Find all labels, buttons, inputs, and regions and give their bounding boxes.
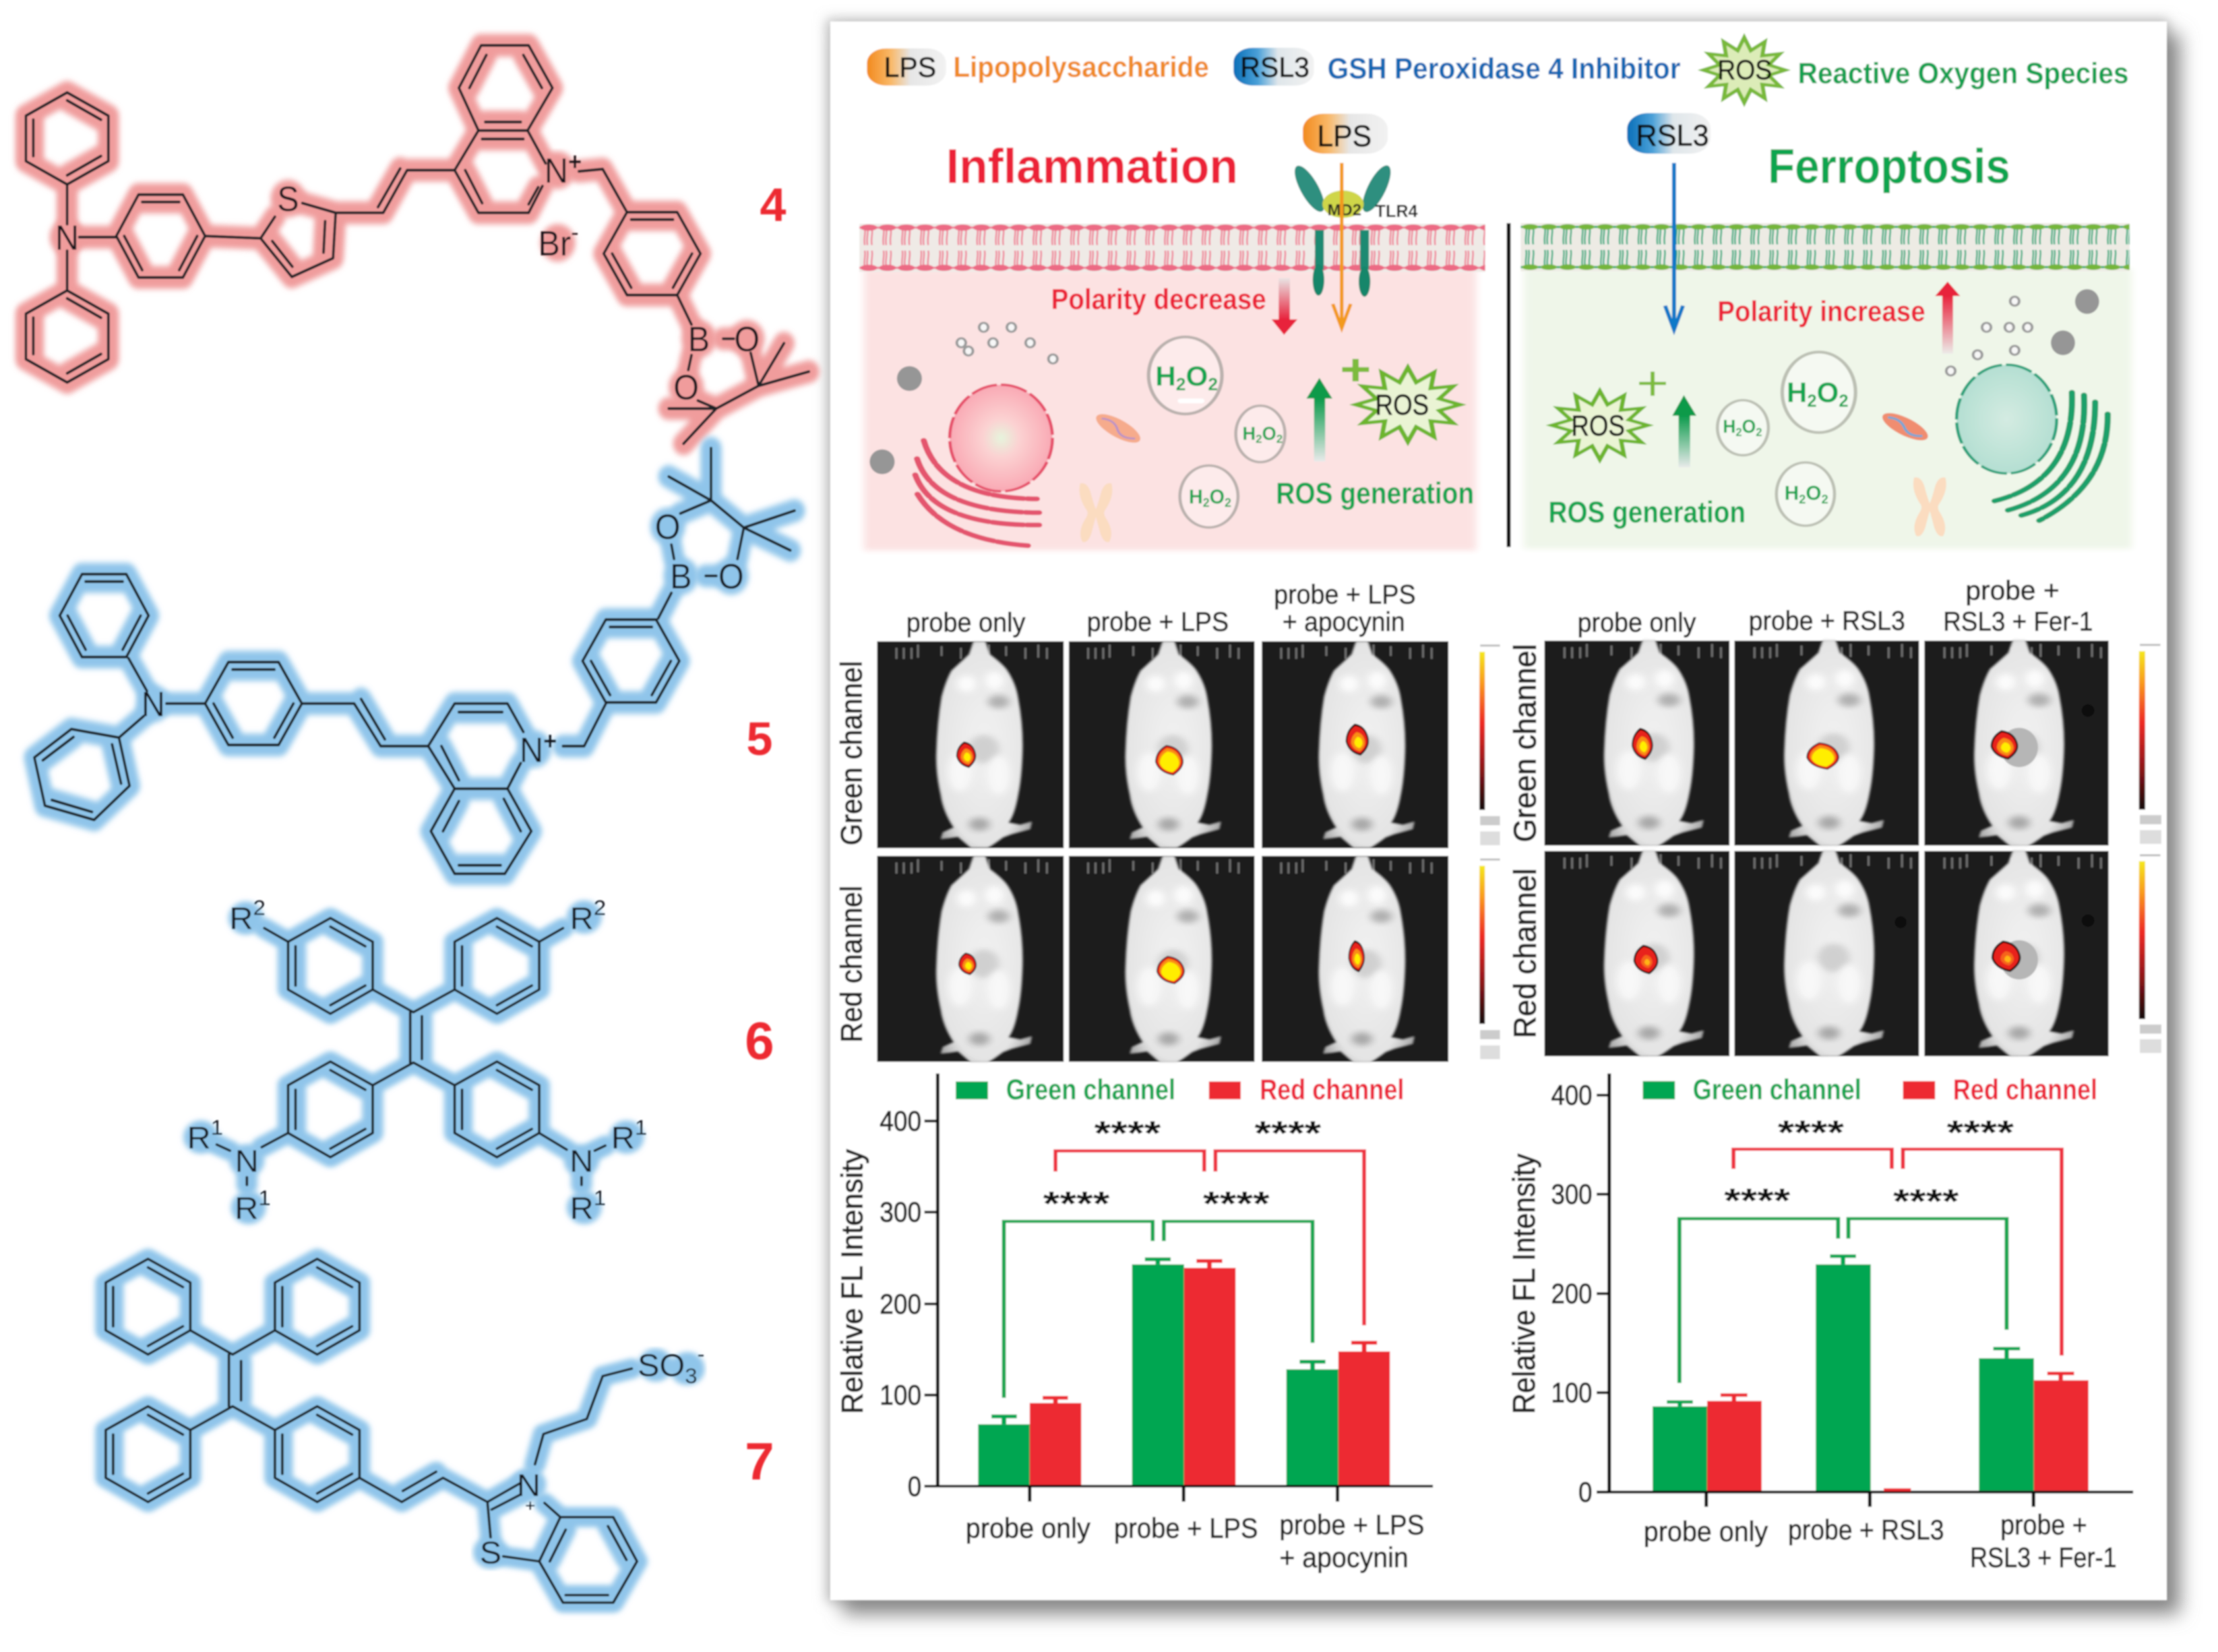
bubble: H2O2 large <box>1148 337 1222 414</box>
panel: inflammation schematic <box>859 114 1511 551</box>
x axis labels: + apocynin <box>1279 1542 1409 1574</box>
label: polarity decrease: Polarity decrease <box>1051 283 1266 315</box>
x axis labels: probe only <box>1644 1517 1768 1548</box>
column labels: probe + <box>1965 576 2060 606</box>
chemical structure: probe 7 with blue halo: 3 <box>685 1364 698 1388</box>
x axis labels <box>1644 1509 2117 1573</box>
chemical structure: probe 6 with blue halo: R <box>229 902 253 936</box>
bubble: H2O2 small: O <box>1262 423 1276 443</box>
bubble: H2O2 medium: 2 <box>1225 496 1231 510</box>
bars: probe only <box>978 1398 1081 1486</box>
heading: Ferroptosis: Ferroptosis <box>1768 139 2010 193</box>
bubble: H2O2 small: 2 <box>1276 433 1283 446</box>
chemical structure: probe 4 with red halo: + <box>568 148 582 176</box>
chemical structure: probe 6 with blue halo <box>187 896 647 1226</box>
organelle: endoplasmic reticulum <box>915 440 1039 546</box>
label: ROS generation: ROS generation <box>1276 477 1474 510</box>
significance brackets: green channel <box>1680 1181 2006 1383</box>
organelles: debris and vesicles <box>1946 289 2099 375</box>
chemical structure: probe 4 with red halo: N <box>545 150 568 190</box>
row label: red channel: Red channel <box>835 886 869 1043</box>
pill: LPS stimulus: LPS <box>1317 120 1372 154</box>
arrow: RSL3 entering the cell <box>1665 163 1683 330</box>
x axis labels <box>966 1509 1424 1574</box>
chemical structure: probe 4 with red halo: O <box>673 367 699 407</box>
colour scale: green channel <box>2139 644 2161 844</box>
bar chart: RSL3 model <box>1506 1073 2133 1573</box>
chemical structure: probe 6 with blue halo: R <box>235 1192 258 1226</box>
significance brackets: green channel: **** <box>1893 1182 1959 1221</box>
arrow: ROS increase <box>1306 378 1332 462</box>
chemical structure: probe 5 with blue halo: B <box>670 556 692 596</box>
row label: green channel: Green channel <box>1507 644 1543 843</box>
column labels: probe + RSL3 <box>1749 606 1905 636</box>
image: probe + LPS + apocynin, green channel <box>1262 641 1448 848</box>
bubble: H2O2 large: 2 <box>1839 392 1849 411</box>
y axis ticks and labels: 100 <box>1551 1377 1593 1409</box>
bars: probe + RSL3 <box>1816 1256 1871 1492</box>
chemical structure: probe 7 with blue halo: - <box>698 1342 705 1366</box>
pill: RSL3 stimulus <box>1627 113 1711 154</box>
x axis labels: probe + LPS <box>1279 1509 1424 1541</box>
significance brackets: red channel <box>1733 1113 2062 1355</box>
y axis ticks and labels: 400 <box>1551 1080 1593 1111</box>
bars: probe + LPS <box>1132 1259 1235 1486</box>
chemical structure: probe 6 with blue halo: N <box>235 1144 259 1179</box>
icon: chromosome <box>1080 483 1112 542</box>
pill: LPS stimulus <box>1303 114 1388 154</box>
chemical structure: probe 4 with red halo: Br <box>538 223 571 263</box>
chemical structure: probe 6 with blue halo: N <box>569 1144 593 1179</box>
significance brackets: green channel: **** <box>1043 1185 1110 1223</box>
cell interior: inflammation <box>864 268 1476 551</box>
column labels: probe + LPS <box>1274 580 1416 609</box>
organelle: endoplasmic reticulum <box>1994 392 2107 520</box>
bubble: H2O2 large: H <box>1787 377 1813 408</box>
image: probe + RSL3 + Fer-1, green channel <box>1924 640 2109 846</box>
bubble: H2O2 medium: 2 <box>1821 492 1828 506</box>
bubble: H2O2 medium: O <box>1806 483 1821 505</box>
bubble: H2O2 medium <box>1777 462 1835 526</box>
y axis ticks and labels: 100 <box>880 1380 921 1411</box>
chemical structure: probe 4 with red halo: - <box>571 218 579 246</box>
cell interior: ferroptosis <box>1524 268 2132 549</box>
chemical structure: probe 5 with blue halo: N <box>142 684 165 724</box>
icon: ROS burst <box>1355 367 1460 442</box>
organelle: nucleus <box>1957 365 2057 473</box>
bubble: H2O2 medium: 2 <box>1799 492 1806 506</box>
y axis ticks and labels: 400 <box>880 1105 921 1137</box>
chemical structure: probe 6 with blue halo: R <box>570 1192 594 1226</box>
column labels <box>1578 576 2093 638</box>
significance brackets: green channel <box>1004 1185 1313 1398</box>
column labels: probe + LPS <box>1087 607 1229 637</box>
bubble: H2O2 large: 2 <box>1208 375 1218 394</box>
x axis labels: probe only <box>966 1512 1090 1544</box>
bubble: H2O2 large: 2 <box>1807 392 1817 411</box>
image: probe + LPS + apocynin, red channel <box>1262 856 1448 1062</box>
bubble: H2O2 medium: H <box>1785 483 1804 505</box>
pill: RSL3 stimulus: RSL3 <box>1636 119 1709 153</box>
bars: probe + RSL3 + Fer-1 <box>1979 1349 2089 1491</box>
legend item: LPS: Lipopolysaccharide <box>953 51 1209 84</box>
chemical structure: probe 4 with red halo: B <box>688 319 710 359</box>
bubble: H2O2 small: 2 <box>1756 426 1762 439</box>
image: probe only, red channel <box>877 856 1064 1062</box>
image: probe only, green channel <box>877 641 1064 848</box>
bars: probe + LPS + apocynin <box>1287 1343 1390 1486</box>
chemical structure: probe 5 with blue halo: O <box>655 507 681 547</box>
compound number 5: 5 <box>747 712 772 765</box>
bubble: H2O2 small: 2 <box>1735 426 1742 439</box>
chemical structure: probe 6 with blue halo: R <box>570 902 594 936</box>
chemical structure: probe 6 with blue halo: 2 <box>594 896 606 919</box>
x axis labels: probe + <box>2000 1509 2087 1541</box>
bubble: H2O2 large: O <box>1817 377 1839 408</box>
x axis labels: probe + RSL3 <box>1788 1515 1944 1546</box>
legend item: RSL3: GSH Peroxidase 4 Inhibitor <box>1328 52 1681 85</box>
chemical structure: probe 4 with red halo: S <box>277 179 299 219</box>
icon: ROS burst: ROS <box>1376 388 1429 421</box>
chart legend <box>956 1074 1404 1106</box>
organelle: mitochondrion <box>1090 409 1146 448</box>
icon: ROS burst <box>1551 391 1648 460</box>
column labels: RSL3 + Fer-1 <box>1943 607 2093 637</box>
image: probe + LPS, green channel <box>1069 641 1254 848</box>
bubble: H2O2 medium: O <box>1210 486 1225 508</box>
significance brackets: red channel: **** <box>1095 1114 1161 1153</box>
y axis ticks and labels: 200 <box>880 1289 921 1320</box>
image: probe + RSL3, green channel <box>1734 640 1919 846</box>
column labels: probe only <box>1578 608 1696 638</box>
label: polarity increase: Polarity increase <box>1717 295 1926 328</box>
legend: abbreviations <box>867 38 2128 102</box>
panel: mouse imaging, LPS model <box>835 580 1500 1062</box>
organelle: mitochondrion <box>1877 408 1934 446</box>
legend item: RSL3: RSL3 <box>1240 52 1310 84</box>
icon: TLR4 MD2 receptor: TLR4 <box>1376 202 1418 221</box>
image: probe only, red channel <box>1545 850 1729 1057</box>
bar: red channel near zero <box>1884 1488 1911 1492</box>
icon: TLR4 MD2 receptor <box>1289 163 1418 297</box>
bubble: H2O2 large: O <box>1185 361 1208 392</box>
arrow: polarity increase <box>1935 282 1960 354</box>
bubble: H2O2 medium: 2 <box>1203 496 1210 510</box>
label: ROS generation: ROS generation <box>1549 495 1746 529</box>
bubble: H2O2 medium: H <box>1189 486 1208 508</box>
legend item: ROS: ROS <box>1717 55 1772 86</box>
axes <box>1597 1074 2133 1507</box>
y axis ticks and labels: 200 <box>1551 1278 1593 1310</box>
compound number 7: 7 <box>745 1432 774 1491</box>
column labels <box>906 580 1416 637</box>
chart legend: Red channel <box>1953 1073 2097 1106</box>
compound number 6: 6 <box>745 1011 774 1070</box>
chemical structure: probe 6 with blue halo: R <box>187 1121 211 1156</box>
x axis labels: probe + LPS <box>1114 1512 1258 1544</box>
bar chart: LPS model <box>835 1074 1433 1574</box>
chemical structure: probe 5 with blue halo: O <box>718 556 744 596</box>
y axis title: Relative FL Intensity <box>835 1149 869 1414</box>
chemical structure: probe 7 with blue halo: + <box>525 1495 536 1515</box>
image: probe only, green channel <box>1545 640 1729 846</box>
chemical structure: probe 5 with blue halo: + <box>543 727 557 755</box>
image: probe + LPS, red channel <box>1069 856 1254 1062</box>
chemical structure: probe 4 with red halo <box>26 45 809 443</box>
panel: mouse imaging, RSL3 model <box>1507 576 2161 1057</box>
legend item: LPS: LPS <box>884 52 936 84</box>
column labels: probe only <box>906 607 1026 637</box>
y axis ticks and labels: 0 <box>1578 1477 1593 1508</box>
panel: ferroptosis schematic <box>1520 113 2132 549</box>
y axis title: Relative FL Intensity <box>1506 1153 1541 1414</box>
y axis ticks and labels <box>1551 1080 1609 1508</box>
arrow: LPS entering the cell <box>1333 163 1351 328</box>
y axis ticks and labels: 0 <box>908 1471 921 1502</box>
chemical structure: probe 5 with blue halo <box>34 448 795 874</box>
legend item: ROS <box>1703 38 2128 102</box>
bubble: H2O2 small <box>1717 400 1768 455</box>
chemical structure: probe 7 with blue halo: N <box>517 1469 541 1503</box>
chart legend: Green channel <box>1006 1074 1175 1106</box>
bubble: H2O2 large: 2 <box>1176 375 1185 394</box>
image: probe + RSL3, red channel <box>1734 850 1919 1057</box>
x axis labels: RSL3 + Fer-1 <box>1970 1542 2117 1573</box>
icon: chromosome <box>1913 477 1946 537</box>
y axis ticks and labels: 300 <box>1551 1179 1593 1211</box>
arrow: ROS increase <box>1672 395 1696 467</box>
organelles: debris and vesicles <box>869 323 1057 474</box>
chemical structure: probe 6 with blue halo: 1 <box>635 1115 647 1139</box>
panel: background card with shadow <box>826 19 2180 1614</box>
arrow: polarity decrease <box>1272 278 1297 335</box>
image: probe + RSL3 + Fer-1, red channel <box>1924 850 2109 1057</box>
chemical structure: probe 6 with blue halo: R <box>611 1121 635 1156</box>
y axis ticks and labels: 300 <box>880 1197 921 1228</box>
bubble: H2O2 small <box>1236 406 1285 462</box>
chemical structure: probe 4 with red halo: O <box>734 319 760 359</box>
y axis ticks and labels <box>880 1105 937 1502</box>
bubble: H2O2 large: H <box>1155 361 1181 392</box>
significance brackets: red channel: **** <box>1778 1113 1844 1152</box>
row label: red channel: Red channel <box>1507 868 1543 1038</box>
chemical structure: probe 6 with blue halo: 1 <box>211 1115 223 1139</box>
colour scale: red channel <box>2139 855 2161 1053</box>
chart legend: Green channel <box>1693 1073 1861 1106</box>
colour scale: green channel <box>1479 644 1500 845</box>
divider <box>1507 223 1511 547</box>
heading: Inflammation: Inflammation <box>946 139 1238 193</box>
icon: plus <box>1639 371 1666 396</box>
chemical structure: probe 6 with blue halo: 2 <box>253 896 266 919</box>
chemical structure: probe 4 with red halo: N <box>55 218 79 257</box>
row label: green channel: Green channel <box>835 661 869 845</box>
bubble: H2O2 medium <box>1180 466 1238 528</box>
icon: ROS burst: ROS <box>1571 409 1625 441</box>
bubble: H2O2 small: 2 <box>1256 433 1262 446</box>
icon: TLR4 MD2 receptor: MD2 <box>1328 201 1361 219</box>
compound number 4: 4 <box>760 179 787 231</box>
legend item: LPS <box>867 49 1209 86</box>
significance brackets: red channel <box>1055 1114 1364 1325</box>
membrane: ferroptosis <box>1520 223 2130 271</box>
icon: plus <box>1342 359 1369 381</box>
axes <box>925 1074 1433 1502</box>
colour scale: red channel <box>1479 859 1500 1059</box>
significance brackets: green channel: **** <box>1203 1185 1270 1223</box>
bubble: H2O2 small: O <box>1742 416 1756 437</box>
membrane: inflammation <box>859 224 1485 272</box>
chart legend: Red channel <box>1260 1074 1404 1106</box>
chemical structure: probe 5 with blue halo: N <box>520 730 543 770</box>
organelle: nucleus <box>950 385 1053 491</box>
chemical structure: probe 6 with blue halo: 1 <box>258 1186 271 1210</box>
chemical structure: probe 7 with blue halo: S <box>480 1536 501 1570</box>
bubble: H2O2 small: H <box>1723 416 1740 437</box>
column labels: + apocynin <box>1283 607 1405 637</box>
chemical structure: probe 7 with blue halo <box>106 1259 705 1603</box>
significance brackets: red channel: **** <box>1254 1114 1322 1153</box>
chart legend <box>1642 1073 2097 1106</box>
bubble: H2O2 large <box>1782 352 1855 433</box>
significance brackets: green channel: **** <box>1724 1181 1790 1220</box>
bars: probe only <box>1653 1395 1762 1492</box>
significance brackets: red channel: **** <box>1947 1113 2014 1152</box>
chemical structure: probe 6 with blue halo: 1 <box>594 1186 606 1210</box>
legend item: RSL3 <box>1233 48 1681 86</box>
bubble: H2O2 small: H <box>1243 423 1260 443</box>
chemical structure: probe 7 with blue halo: SO <box>638 1349 685 1383</box>
